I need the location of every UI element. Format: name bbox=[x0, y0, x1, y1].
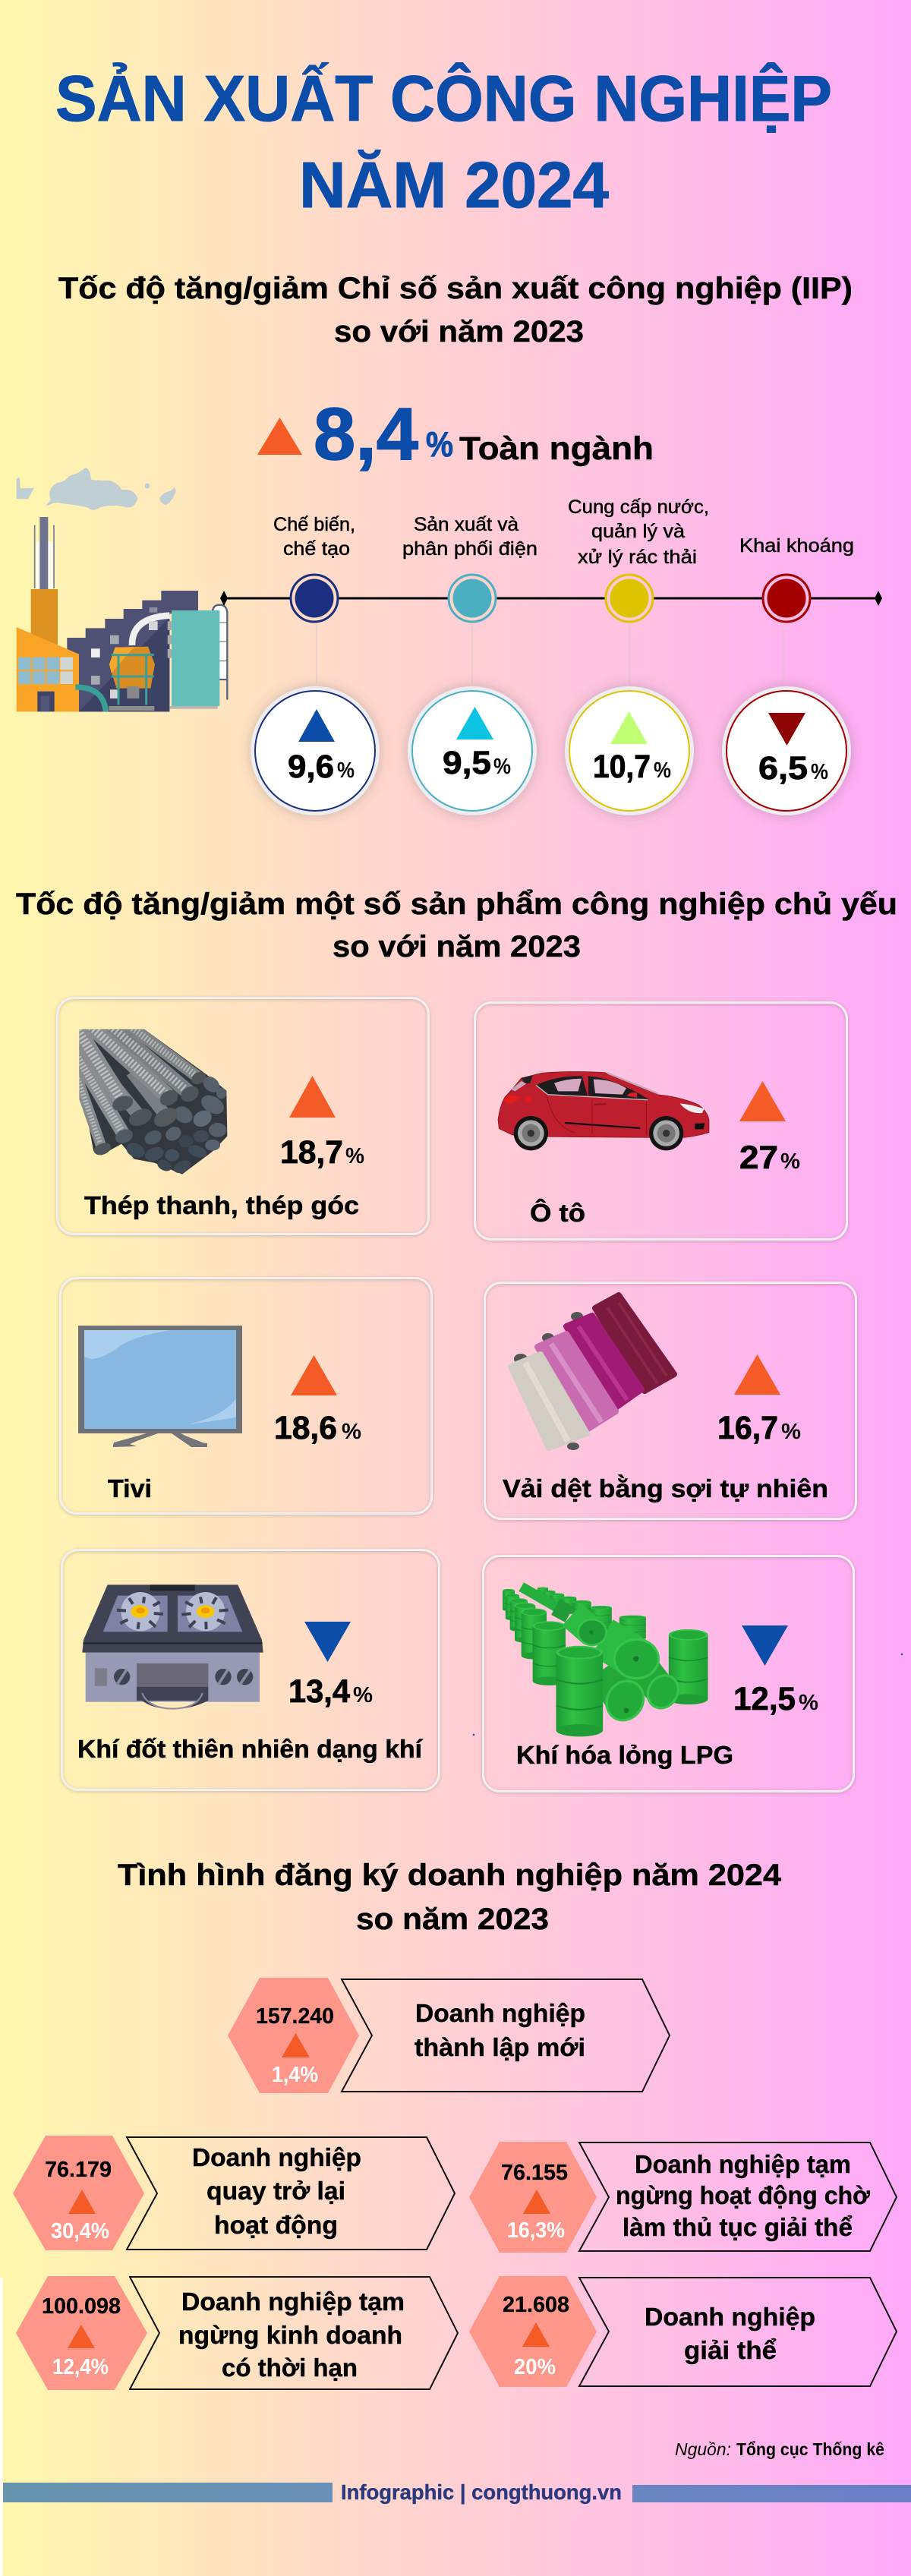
panel: LPG: % bbox=[799, 1691, 818, 1715]
category labels bbox=[273, 497, 854, 568]
overall figure bbox=[257, 393, 654, 475]
panel: vải dệt bbox=[484, 1283, 856, 1518]
category labels: Sản xuất và bbox=[414, 514, 519, 535]
connector lines bbox=[317, 624, 783, 683]
item: giải thể bbox=[469, 2276, 897, 2387]
heading: IIP: so với năm 2023 bbox=[334, 315, 584, 348]
overall figure: % bbox=[426, 424, 453, 464]
panel: tivi: 18,6 bbox=[274, 1410, 337, 1446]
badge: Sản xuất và phân phối điện 9,5%: 9,5 bbox=[443, 745, 491, 781]
item: tạm ngừng kinh doanh: 12,4% bbox=[52, 2355, 109, 2379]
title: SẢN XUẤT CÔNG NGHIỆP bbox=[55, 62, 832, 135]
category labels: Khai khoáng bbox=[739, 535, 854, 557]
panel: tivi: % bbox=[342, 1420, 361, 1444]
timeline nodes bbox=[291, 575, 810, 622]
item: thành lập mới: 1,4% bbox=[272, 2063, 318, 2087]
icon: gas stove bbox=[82, 1584, 263, 1709]
item: quay trở lại hoạt động: hoạt động bbox=[214, 2211, 338, 2239]
item: quay trở lại hoạt động: 76.179 bbox=[45, 2158, 112, 2182]
item: quay trở lại hoạt động: 30,4% bbox=[51, 2219, 109, 2243]
item: thành lập mới bbox=[228, 1978, 670, 2093]
category labels: Chế biến, bbox=[273, 514, 355, 535]
overall figure: Toàn ngành bbox=[459, 430, 654, 467]
panel: khí đốt: Khí đốt thiên nhiên dạng khí bbox=[77, 1735, 424, 1763]
badge: Chế biến, chế tạo 9,6%: % bbox=[337, 758, 355, 783]
badge: Sản xuất và phân phối điện 9,5% bbox=[408, 686, 537, 815]
panel: vải dệt: 16,7 bbox=[717, 1410, 778, 1446]
badge: Chế biến, chế tạo 9,6% bbox=[251, 686, 380, 815]
heading: products: Tốc độ tăng/giảm một số sản phẩm công nghiệp chủ yếu bbox=[16, 888, 897, 921]
panel: thép: Thép thanh, thép góc bbox=[84, 1191, 359, 1219]
item: tạm ngừng hoạt động chờ giải thể: làm thủ tục giải thể bbox=[623, 2213, 853, 2241]
panel: vải dệt: Vải dệt bằng sợi tự nhiên bbox=[503, 1474, 828, 1502]
stray dots bbox=[473, 1654, 903, 1736]
left edge strip bbox=[0, 2278, 3, 2576]
source: Tổng cục Thống kê bbox=[736, 2439, 884, 2459]
item: quay trở lại hoạt động: Doanh nghiệp bbox=[192, 2143, 361, 2171]
heading: enterprises bbox=[118, 1859, 782, 1936]
icon: rebar bbox=[79, 1029, 228, 1174]
badge: Khai khoáng 6,5% bbox=[722, 686, 851, 815]
badge: Khai khoáng 6,5%: 6,5 bbox=[758, 750, 808, 787]
title bbox=[55, 62, 832, 222]
panel: khí đốt: 13,4 bbox=[288, 1673, 350, 1710]
item: giải thể: Doanh nghiệp bbox=[645, 2303, 815, 2331]
item: giải thể: 20% bbox=[514, 2355, 556, 2379]
icon: green barrels bbox=[503, 1587, 708, 1736]
item: giải thể: giải thể bbox=[684, 2336, 777, 2364]
item: tạm ngừng hoạt động chờ giải thể: 16,3% bbox=[507, 2218, 565, 2243]
category labels: phân phối điện bbox=[402, 538, 537, 560]
source bbox=[675, 2439, 884, 2459]
item: tạm ngừng hoạt động chờ giải thể: Doanh nghiệp tạm bbox=[635, 2150, 851, 2178]
item: tạm ngừng kinh doanh: có thời hạn bbox=[222, 2354, 358, 2382]
icon: yarn spools bbox=[511, 1295, 674, 1450]
category labels: chế tạo bbox=[283, 538, 350, 560]
item: tạm ngừng hoạt động chờ giải thể: ngừng hoạt động chờ bbox=[616, 2181, 871, 2209]
item: tạm ngừng hoạt động chờ giải thể: 76.155 bbox=[501, 2161, 568, 2185]
heading: products bbox=[16, 888, 897, 963]
item: thành lập mới: 157.240 bbox=[256, 2004, 334, 2029]
badge: Cung cấp nước 10,7% bbox=[565, 686, 694, 815]
panel: LPG bbox=[483, 1556, 853, 1792]
item: giải thể: 21.608 bbox=[503, 2293, 569, 2317]
panel: ô tô: Ô tô bbox=[530, 1198, 585, 1227]
heading: IIP: Tốc độ tăng/giảm Chỉ số sản xuất công nghiệp (IIP) bbox=[58, 272, 853, 305]
panel: LPG: 12,5 bbox=[733, 1681, 796, 1717]
footer: Infographic | congthuong.vn bbox=[341, 2480, 622, 2504]
badge: Chế biến, chế tạo 9,6%: 9,6 bbox=[288, 749, 334, 785]
panel: ô tô: 27 bbox=[739, 1140, 778, 1176]
icon: factory bbox=[17, 468, 227, 711]
timeline bbox=[220, 591, 882, 606]
panel: thép: 18,7 bbox=[280, 1134, 343, 1171]
item: quay trở lại hoạt động: quay trở lại bbox=[206, 2177, 345, 2205]
heading: enterprises: so năm 2023 bbox=[356, 1903, 549, 1936]
heading: products: so với năm 2023 bbox=[333, 930, 581, 963]
badge: Sản xuất và phân phối điện 9,5%: % bbox=[493, 755, 511, 779]
panel: tivi bbox=[61, 1279, 431, 1514]
item: tạm ngừng kinh doanh: ngừng kinh doanh bbox=[178, 2321, 402, 2349]
panel: vải dệt: % bbox=[781, 1420, 801, 1444]
title: NĂM 2024 bbox=[299, 150, 609, 222]
category labels: xử lý rác thải bbox=[578, 547, 697, 568]
item: tạm ngừng kinh doanh: 100.098 bbox=[42, 2294, 121, 2319]
panel: LPG: Khí hóa lỏng LPG bbox=[516, 1741, 733, 1769]
icon: car bbox=[498, 1071, 709, 1150]
badge: Cung cấp nước 10,7%: 10,7 bbox=[593, 749, 651, 785]
item: tạm ngừng hoạt động chờ giải thể bbox=[469, 2142, 897, 2253]
panel: ô tô bbox=[475, 1002, 847, 1239]
category labels: quản lý và bbox=[591, 521, 685, 542]
badge: Cung cấp nước 10,7%: % bbox=[654, 758, 671, 783]
panel: khí đốt: % bbox=[353, 1683, 373, 1707]
badge: Khai khoáng 6,5%: % bbox=[811, 760, 828, 784]
item: tạm ngừng kinh doanh: Doanh nghiệp tạm bbox=[181, 2288, 405, 2316]
panel: ô tô: % bbox=[780, 1149, 800, 1174]
heading: IIP bbox=[58, 272, 853, 348]
category labels: Cung cấp nước, bbox=[568, 497, 709, 518]
icon: TV bbox=[78, 1326, 242, 1447]
source: Nguồn: bbox=[675, 2439, 731, 2459]
item: thành lập mới: thành lập mới bbox=[415, 2033, 585, 2061]
footer bbox=[3, 2480, 911, 2504]
heading: enterprises: Tình hình đăng ký doanh nghiệp năm 2024 bbox=[118, 1859, 782, 1892]
panel: thép: % bbox=[345, 1144, 364, 1168]
item: quay trở lại hoạt động bbox=[13, 2136, 455, 2250]
item: tạm ngừng kinh doanh bbox=[16, 2276, 458, 2390]
overall figure: 8,4 bbox=[314, 393, 418, 475]
item: thành lập mới: Doanh nghiệp bbox=[415, 1999, 585, 2027]
panel: tivi: Tivi bbox=[108, 1474, 152, 1502]
panel: khí đốt bbox=[62, 1550, 439, 1790]
panel: thép bbox=[58, 998, 428, 1234]
